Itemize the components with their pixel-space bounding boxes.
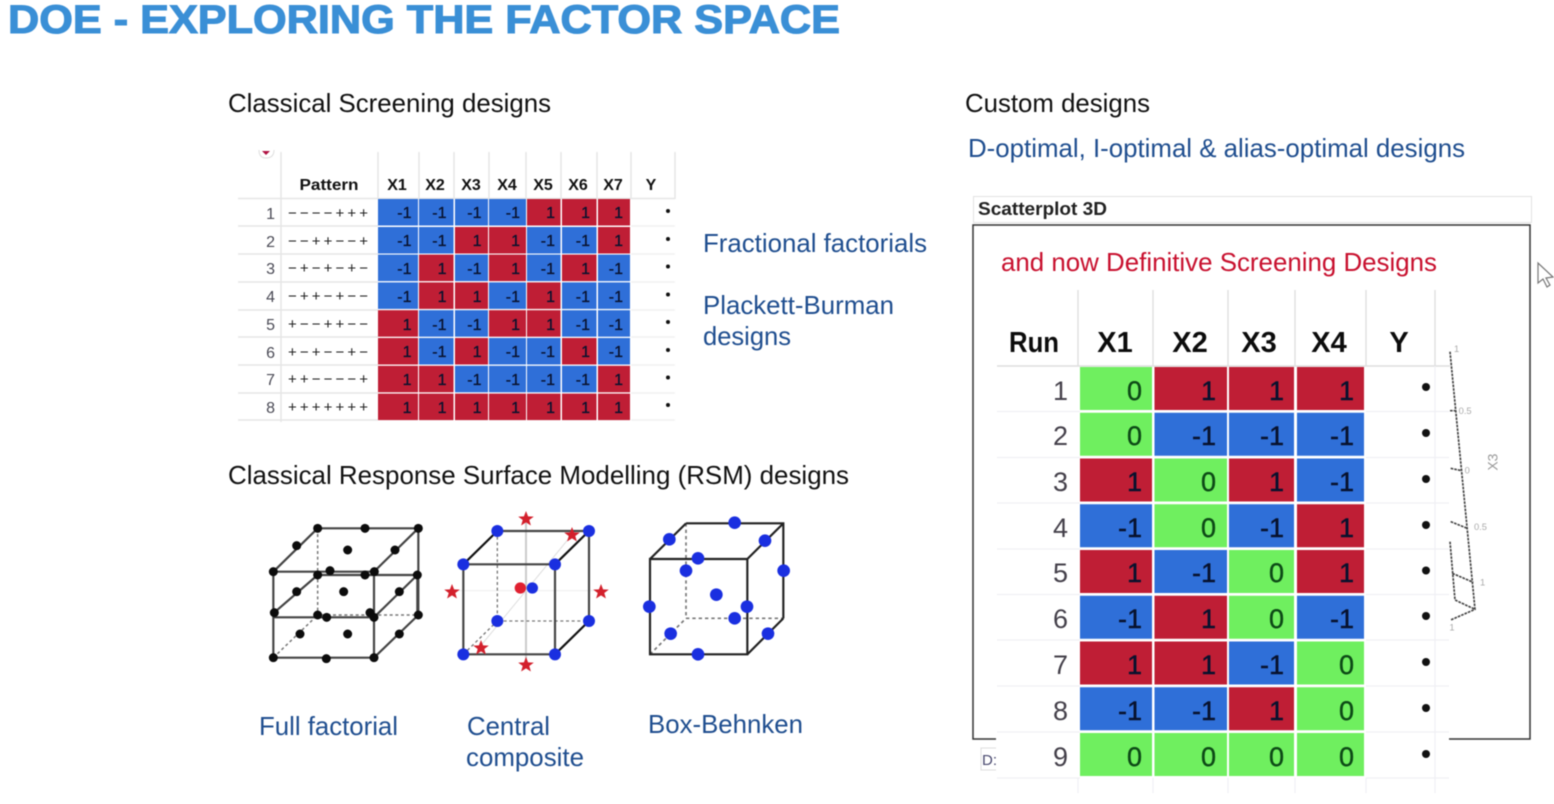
- pattern column: [288, 205, 368, 416]
- pattern column: +++++++: [288, 399, 368, 416]
- table header row: [300, 177, 657, 194]
- coloured factor cells: 1: [546, 205, 555, 222]
- coloured factor cells: 1: [581, 205, 590, 222]
- coloured factor cells: 0: [1201, 742, 1216, 772]
- run numbers: 9: [1053, 742, 1068, 772]
- heading: classical screening designs: Classical Screening designs: [228, 88, 551, 118]
- pattern column: −++−+−−: [288, 288, 368, 305]
- table header row: X5: [533, 177, 553, 194]
- coloured factor cells: 1: [403, 317, 412, 334]
- coloured factor cells: -1: [609, 317, 623, 334]
- coloured factor cells: 0: [1269, 742, 1284, 772]
- coloured factor cells: 1: [546, 400, 555, 417]
- coloured factor cells: 1: [614, 205, 623, 222]
- coloured factor cells: [1080, 367, 1364, 776]
- coloured factor cells: -1: [576, 289, 590, 306]
- label: central composite: composite: [466, 742, 584, 772]
- icon: red dropdown marker: [259, 150, 274, 158]
- row numbers: [266, 206, 275, 417]
- coloured factor cells: 1: [473, 344, 482, 361]
- coloured factor cells: 1: [438, 261, 447, 278]
- coloured factor cells: -1: [506, 289, 520, 306]
- coloured factor cells: 0: [1127, 376, 1142, 406]
- subheading: optimal designs: D-optimal, I-optimal & alias-optimal designs: [968, 133, 1465, 163]
- coloured factor cells: 1: [1127, 558, 1142, 588]
- coloured factor cells: 1: [403, 400, 412, 417]
- coloured factor cells: 1: [473, 233, 482, 250]
- coloured factor cells: -1: [576, 317, 590, 334]
- row numbers: 1: [266, 206, 275, 223]
- run numbers: 1: [1053, 376, 1068, 406]
- coloured factor cells: -1: [1260, 513, 1284, 543]
- coloured factor cells: 0: [1339, 742, 1354, 772]
- coloured factor cells: -1: [397, 233, 412, 250]
- run numbers: 7: [1053, 650, 1068, 680]
- panel: scatterplot frame: [973, 225, 1530, 739]
- coloured factor cells: 1: [473, 289, 482, 306]
- row numbers: 7: [266, 372, 275, 389]
- coloured factor cells: -1: [541, 344, 555, 361]
- run numbers: 6: [1053, 604, 1068, 634]
- row numbers: 4: [266, 289, 275, 306]
- scatterplot axis remnant: 1: [1449, 623, 1455, 633]
- coloured factor cells: -1: [467, 317, 482, 334]
- coloured factor cells: 1: [614, 233, 623, 250]
- label: Plackett-Burman designs: designs: [703, 321, 791, 351]
- coloured factor cells: 1: [473, 400, 482, 417]
- callout: definitive screening designs: and now Definitive Screening Designs: [1001, 247, 1437, 277]
- coloured factor cells: 1: [581, 261, 590, 278]
- coloured factor cells: -1: [1330, 467, 1354, 497]
- coloured factor cells: -1: [467, 261, 482, 278]
- pattern column: −+−+−+−: [288, 260, 368, 277]
- table header row: [1009, 327, 1409, 359]
- coloured factor cells: 0: [1269, 604, 1284, 634]
- coloured factor cells: 1: [438, 289, 447, 306]
- coloured factor cells: -1: [1330, 604, 1354, 634]
- table header row: Y: [646, 177, 657, 194]
- row numbers: 8: [266, 400, 275, 417]
- table: definitive screening design: [996, 290, 1450, 794]
- coloured factor cells: -1: [1192, 558, 1216, 588]
- label: full factorial: Full factorial: [259, 711, 398, 741]
- coloured factor cells: -1: [397, 205, 412, 222]
- run numbers: 2: [1053, 421, 1068, 451]
- label: Plackett-Burman designs: Plackett-Burman: [703, 290, 894, 320]
- coloured factor cells: 0: [1339, 696, 1354, 726]
- table header row: Pattern: [300, 177, 358, 194]
- coloured factor cells: -1: [1118, 696, 1142, 726]
- table header row: X3: [1241, 327, 1277, 359]
- table: screening design pattern: [238, 150, 675, 422]
- row numbers: 5: [266, 317, 275, 334]
- coloured factor cells: 1: [511, 261, 520, 278]
- coloured factor cells: -1: [1260, 421, 1284, 451]
- diagram: Box-Behnken cube: [643, 516, 790, 661]
- coloured factor cells: 1: [511, 233, 520, 250]
- table header row: X7: [603, 177, 623, 194]
- coloured factor cells: -1: [1330, 421, 1354, 451]
- coloured factor cells: -1: [1192, 696, 1216, 726]
- coloured factor cells: -1: [1192, 421, 1216, 451]
- coloured factor cells: -1: [576, 372, 590, 389]
- scatterplot axis remnant: 1: [1454, 344, 1459, 354]
- heading: response surface designs: Classical Response Surface Modelling (RSM) designs: [228, 460, 849, 490]
- coloured factor cells: 1: [1201, 604, 1216, 634]
- Y column dots: [666, 209, 670, 407]
- pattern column: −−++−−+: [288, 233, 368, 250]
- heading: custom designs: Custom designs: [965, 88, 1150, 118]
- run numbers: 3: [1053, 467, 1068, 497]
- coloured factor cells: 1: [1339, 558, 1354, 588]
- scatterplot axis remnant: [1449, 344, 1500, 633]
- coloured factor cells: 1: [438, 372, 447, 389]
- scatterplot axis remnant: 0: [1465, 465, 1470, 475]
- coloured factor cells: 0: [1127, 421, 1142, 451]
- coloured factor cells: -1: [1118, 604, 1142, 634]
- panel: Scatterplot 3D title bar: Scatterplot 3D: [978, 199, 1107, 219]
- coloured factor cells: -1: [1260, 650, 1284, 680]
- coloured factor cells: -1: [467, 205, 482, 222]
- coloured factor cells: 1: [581, 400, 590, 417]
- table header row: X2: [1172, 327, 1208, 359]
- pattern column: −−−−+++: [288, 205, 368, 222]
- coloured factor cells: -1: [609, 289, 623, 306]
- icon: mouse cursor: [1538, 263, 1553, 287]
- coloured factor cells: -1: [541, 233, 555, 250]
- coloured factor cells: -1: [609, 344, 623, 361]
- pattern column: ++−−−−+: [288, 371, 368, 388]
- coloured factor cells: 0: [1201, 467, 1216, 497]
- table header row: Y: [1389, 327, 1409, 359]
- coloured factor cells: [378, 199, 630, 420]
- scatterplot axis remnant: 0.5: [1459, 406, 1472, 416]
- coloured factor cells: 1: [438, 400, 447, 417]
- run numbers: 5: [1053, 558, 1068, 588]
- label: Plackett-Burman designs: [703, 290, 894, 351]
- label: central composite: Central: [467, 711, 550, 741]
- run numbers: 8: [1053, 696, 1068, 726]
- coloured factor cells: -1: [432, 344, 447, 361]
- coloured factor cells: -1: [506, 205, 520, 222]
- table header row: X3: [461, 177, 481, 194]
- scatterplot axis remnant: X3: [1484, 453, 1500, 471]
- coloured factor cells: -1: [432, 205, 447, 222]
- row numbers: 6: [266, 345, 275, 362]
- coloured factor cells: -1: [432, 233, 447, 250]
- Y column dots: [1422, 383, 1430, 758]
- coloured factor cells: 1: [1339, 376, 1354, 406]
- tab: clipped D label: [981, 748, 1001, 770]
- coloured factor cells: -1: [432, 317, 447, 334]
- coloured factor cells: 1: [546, 317, 555, 334]
- coloured factor cells: -1: [576, 233, 590, 250]
- coloured factor cells: -1: [467, 372, 482, 389]
- table header row: X2: [425, 177, 445, 194]
- coloured factor cells: -1: [506, 372, 520, 389]
- pattern column: +−−++−−: [288, 316, 368, 333]
- table header row: Run: [1009, 327, 1059, 359]
- coloured factor cells: 1: [1127, 650, 1142, 680]
- diagram: central composite cube: [444, 511, 609, 672]
- panel: Scatterplot 3D title bar: [974, 196, 1532, 222]
- coloured factor cells: 1: [1201, 376, 1216, 406]
- coloured factor cells: -1: [397, 289, 412, 306]
- row numbers: 3: [266, 261, 275, 278]
- coloured factor cells: 1: [614, 400, 623, 417]
- coloured factor cells: 1: [1269, 376, 1284, 406]
- coloured factor cells: 1: [1269, 696, 1284, 726]
- scatterplot axis remnant: 0.5: [1474, 522, 1487, 532]
- coloured factor cells: -1: [1118, 513, 1142, 543]
- table header row: X1: [1097, 327, 1133, 359]
- coloured factor cells: 1: [546, 289, 555, 306]
- table header row: X4: [1311, 327, 1347, 359]
- coloured factor cells: 1: [403, 372, 412, 389]
- tab: clipped D label: D:: [982, 752, 997, 769]
- label: central composite: [466, 711, 584, 772]
- run numbers: [1053, 376, 1068, 772]
- coloured factor cells: 0: [1201, 513, 1216, 543]
- table header row: X1: [387, 177, 407, 194]
- diagram: full factorial cube: [269, 524, 423, 663]
- coloured factor cells: -1: [506, 344, 520, 361]
- coloured factor cells: 1: [403, 344, 412, 361]
- pattern column: +−+−−+−: [288, 344, 368, 361]
- coloured factor cells: -1: [541, 261, 555, 278]
- coloured factor cells: -1: [541, 372, 555, 389]
- coloured factor cells: 1: [1201, 650, 1216, 680]
- coloured factor cells: 0: [1269, 558, 1284, 588]
- coloured factor cells: 0: [1339, 650, 1354, 680]
- label: Box-Behnken: Box-Behnken: [648, 709, 803, 739]
- row numbers: 2: [266, 234, 275, 251]
- coloured factor cells: 1: [581, 344, 590, 361]
- coloured factor cells: -1: [397, 261, 412, 278]
- table header row: X4: [497, 177, 517, 194]
- table header row: X6: [568, 177, 588, 194]
- table grid: [238, 152, 675, 422]
- coloured factor cells: 1: [614, 372, 623, 389]
- coloured factor cells: 1: [511, 317, 520, 334]
- coloured factor cells: 1: [1339, 513, 1354, 543]
- coloured factor cells: 1: [511, 400, 520, 417]
- coloured factor cells: -1: [609, 261, 623, 278]
- label: fractional factorials: Fractional factorials: [703, 228, 927, 258]
- coloured factor cells: 1: [1269, 467, 1284, 497]
- coloured factor cells: 0: [1127, 742, 1142, 772]
- table grid: [997, 290, 1450, 793]
- table background: [996, 290, 1449, 794]
- run numbers: 4: [1053, 513, 1068, 543]
- scatterplot axis remnant: 1: [1480, 577, 1485, 587]
- coloured factor cells: 1: [1127, 467, 1142, 497]
